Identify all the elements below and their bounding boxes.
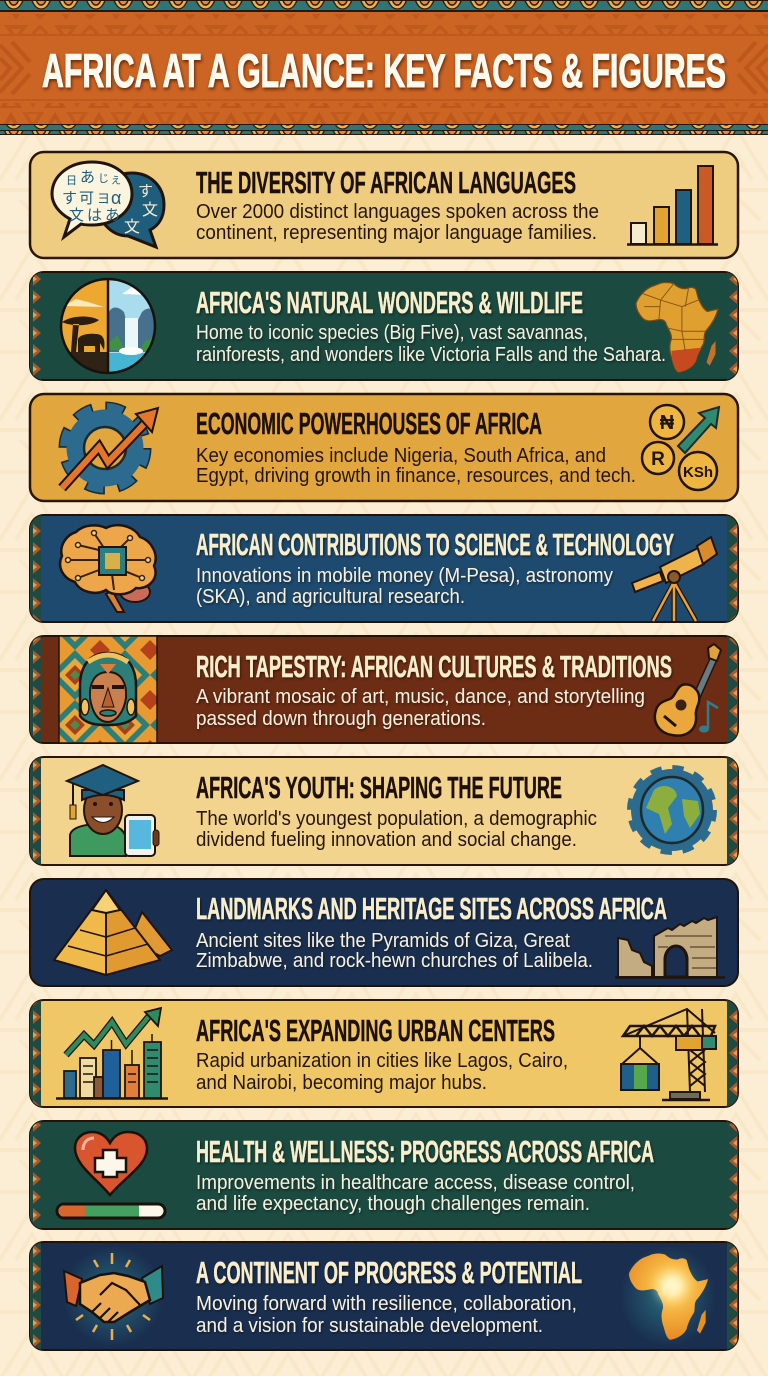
text block: rainforests, and wonders like Victoria Falls and the Sahara. (196, 344, 666, 366)
text block: Egypt, driving growth in finance, resources, and tech. (196, 465, 636, 487)
text block: The world's youngest population, a demographic (196, 808, 597, 830)
icon: patterned mask panel (59, 636, 157, 743)
icon: pyramids (54, 890, 172, 975)
icon: speech bubbles: え (111, 175, 121, 187)
text block: Over 2000 distinct languages spoken across the (196, 201, 599, 223)
panel: urban centers (30, 1000, 738, 1107)
text block (196, 1050, 568, 1094)
text block: Rapid urbanization in cities like Lagos, Cairo, (196, 1050, 568, 1072)
icon: map of Africa (636, 282, 718, 372)
text block: and a vision for sustainable development. (196, 1315, 543, 1337)
icon: construction crane (621, 1009, 716, 1100)
panel: youth (30, 757, 738, 865)
text block (196, 1172, 635, 1215)
icon: speech bubbles: あ (105, 207, 120, 224)
icon: currency coins and arrow: R (651, 449, 665, 470)
icon: heart with medical cross (75, 1132, 147, 1195)
text block: Moving forward with resilience, collaboration, (196, 1293, 577, 1315)
icon: city skyline with growth arrow (56, 1008, 168, 1098)
panel: health (30, 1121, 738, 1229)
text block (196, 445, 636, 487)
text block: (SKA), and agricultural research. (196, 586, 465, 608)
icon: brain with chip (60, 525, 156, 612)
text block (196, 322, 666, 366)
text block: Improvements in healthcare access, disease control, (196, 1172, 635, 1194)
icon: speech bubbles: 文 (124, 218, 140, 236)
icon: globe in gear (631, 769, 713, 851)
icon: currency coins and arrow (642, 405, 719, 490)
text block (196, 1293, 577, 1337)
icon: speech bubbles: α (111, 188, 121, 208)
icon: speech bubbles: 文 (69, 207, 84, 224)
icon: speech bubbles: 可 (79, 190, 94, 207)
text block (196, 201, 599, 244)
text block: Ancient sites like the Pyramids of Giza, Great (196, 930, 570, 952)
panel: science and technology (30, 515, 738, 622)
icon: glowing Africa map (620, 1246, 716, 1346)
text block (196, 808, 597, 851)
icon: handshake (63, 1246, 163, 1346)
icon: guitar and music note (655, 644, 721, 736)
panel: landmarks (30, 879, 738, 986)
icon: speech bubbles: す (138, 183, 153, 200)
icon: speech bubbles: ヨ (97, 191, 110, 206)
icon: speech bubbles: 文 (142, 201, 158, 219)
header banner (0, 0, 768, 135)
icon: telescope (632, 537, 717, 621)
panel: economic powerhouses (30, 394, 738, 501)
icon: gear with growth arrow (62, 408, 158, 488)
text block: and life expectancy, though challenges remain. (196, 1193, 590, 1215)
icon: currency coins and arrow: ₦ (660, 412, 675, 434)
icon: speech bubbles: す (62, 190, 77, 207)
icon: speech bubbles (52, 162, 164, 247)
text block (196, 565, 613, 608)
progress bar (57, 1204, 165, 1218)
icon: currency coins and arrow: KSh (683, 464, 713, 481)
icon: speech bubbles: あ (80, 169, 95, 186)
panel: languages (30, 152, 738, 258)
text block: A vibrant mosaic of art, music, dance, and storytelling (196, 686, 645, 708)
text block: Home to iconic species (Big Five), vast savannas, (196, 322, 588, 344)
icon: savanna and waterfall (60, 278, 157, 377)
text block: Zimbabwe, and rock-hewn churches of Lalibela. (196, 950, 593, 972)
panel: cultures and traditions (30, 636, 738, 743)
panel: progress and potential (30, 1242, 738, 1350)
text block: dividend fueling innovation and social change. (196, 829, 577, 851)
icon: graduate with tablet (67, 765, 159, 856)
icon: stone ruins (615, 917, 725, 978)
text block (196, 930, 593, 972)
panel: natural wonders (30, 272, 738, 380)
text block: passed down through generations. (196, 708, 486, 730)
text block: continent, representing major language families. (196, 222, 597, 244)
icon: speech bubbles: 日 (66, 175, 77, 187)
text block (196, 686, 645, 730)
text block: Innovations in mobile money (M-Pesa), astronomy (196, 565, 613, 587)
bar chart (627, 166, 718, 244)
text block: and Nairobi, becoming major hubs. (196, 1072, 487, 1094)
icon: speech bubbles: は (87, 207, 102, 224)
text block: Key economies include Nigeria, South Africa, and (196, 445, 606, 467)
icon: speech bubbles: じ (98, 172, 109, 185)
